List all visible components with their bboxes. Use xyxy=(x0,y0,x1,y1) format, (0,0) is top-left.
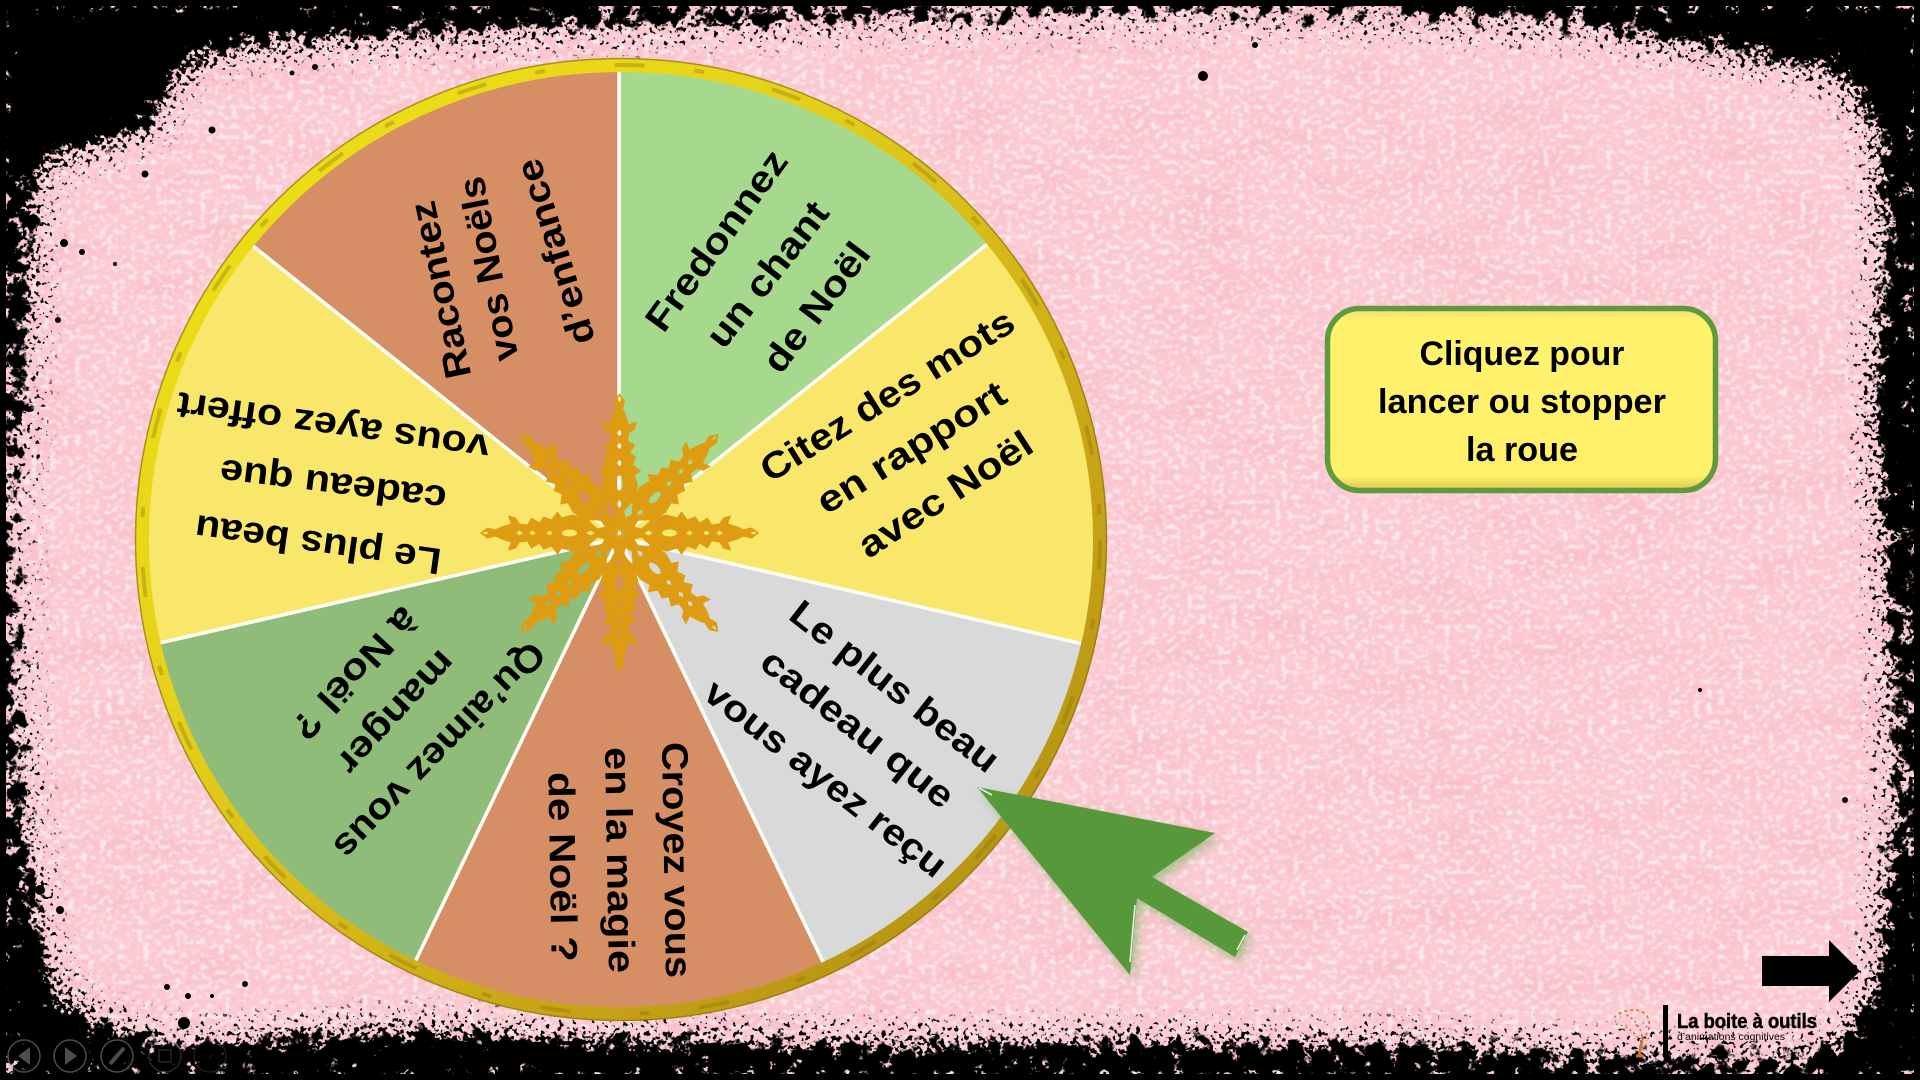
button label: la roue xyxy=(1466,431,1578,469)
logo text: d’animations cognitives xyxy=(1677,1032,1785,1043)
sector: Racontez vos Noëls d'enfance: vos Noëls xyxy=(451,173,526,365)
slideshow navigation controls xyxy=(8,1040,226,1072)
sector: Le plus beau cadeau que vous ayez offert xyxy=(174,384,492,582)
sector: Le plus beau cadeau que vous ayez offert: cadeau que xyxy=(217,451,449,520)
logo divider xyxy=(1663,1005,1668,1057)
logo text: La boite à outils xyxy=(1677,1011,1817,1033)
sector: Qu'aimez vous manger à Noël ?: manger xyxy=(329,642,464,783)
sector: Croyez vous en la magie de Noël ? xyxy=(540,742,699,978)
sector: Citez des mots en rapport avec Noël: Citez des mots xyxy=(753,301,1022,490)
sector: Citez des mots en rapport avec Noël: avec Noël xyxy=(850,423,1040,566)
icon: orange tree xyxy=(1612,1010,1649,1056)
sector: Le plus beau cadeau que vous ayez reçu: cadeau que xyxy=(753,640,963,817)
sector: Le plus beau cadeau que vous ayez reçu xyxy=(696,592,1007,886)
sector: Racontez vos Noëls d'enfance: d’enfance xyxy=(508,154,603,350)
logo text xyxy=(1677,1011,1817,1043)
start/stop button xyxy=(1328,308,1716,490)
sector: Racontez vos Noëls d'enfance: Racontez xyxy=(402,198,479,382)
sector: Le plus beau cadeau que vous ayez offert: Le plus beau xyxy=(192,507,444,582)
icon: gold snowflake hub xyxy=(480,394,758,672)
sector: Fredonnez un chant de Noël: de Noël xyxy=(754,234,879,380)
button label: lancer ou stopper xyxy=(1378,383,1666,421)
button box xyxy=(1328,308,1716,490)
sector: Croyez vous en la magie de Noël ?: de Noël ? xyxy=(540,772,585,962)
sector: Croyez vous en la magie de Noël ?: en la magie xyxy=(597,747,642,973)
sector: Qu'aimez vous manger à Noël ? xyxy=(283,599,554,868)
sector: Le plus beau cadeau que vous ayez reçu: vous ayez reçu xyxy=(696,671,955,886)
button label xyxy=(1378,335,1666,469)
wheel sectors xyxy=(149,72,1093,1007)
sector: Croyez vous en la magie de Noël ?: Croyez vous xyxy=(654,742,699,978)
next-slide arrow xyxy=(1762,940,1860,1002)
sector: Le plus beau cadeau que vous ayez reçu: Le plus beau xyxy=(782,592,1007,781)
sector: Citez des mots en rapport avec Noël: en rapport xyxy=(809,373,1014,522)
sector: Fredonnez un chant de Noël xyxy=(637,142,879,380)
green pointer arrow xyxy=(977,787,1252,980)
sector: Citez des mots en rapport avec Noël xyxy=(753,301,1040,566)
sector: Qu'aimez vous manger à Noël ?: Qu’aimez vous xyxy=(326,634,554,868)
logo: La boite à outils xyxy=(1612,1005,1817,1057)
sector: Fredonnez un chant de Noël: Fredonnez xyxy=(637,142,796,339)
button label: Cliquez pour xyxy=(1420,335,1624,373)
sector: Fredonnez un chant de Noël: un chant xyxy=(698,193,837,355)
spinning wheel xyxy=(134,58,1108,1022)
sector: Racontez vos Noëls d'enfance xyxy=(402,154,603,382)
sector: Qu'aimez vous manger à Noël ?: à Noël ? xyxy=(283,599,426,748)
sector: Le plus beau cadeau que vous ayez offert: vous ayez offert xyxy=(174,384,492,469)
wheel gold rim xyxy=(136,58,1106,1020)
